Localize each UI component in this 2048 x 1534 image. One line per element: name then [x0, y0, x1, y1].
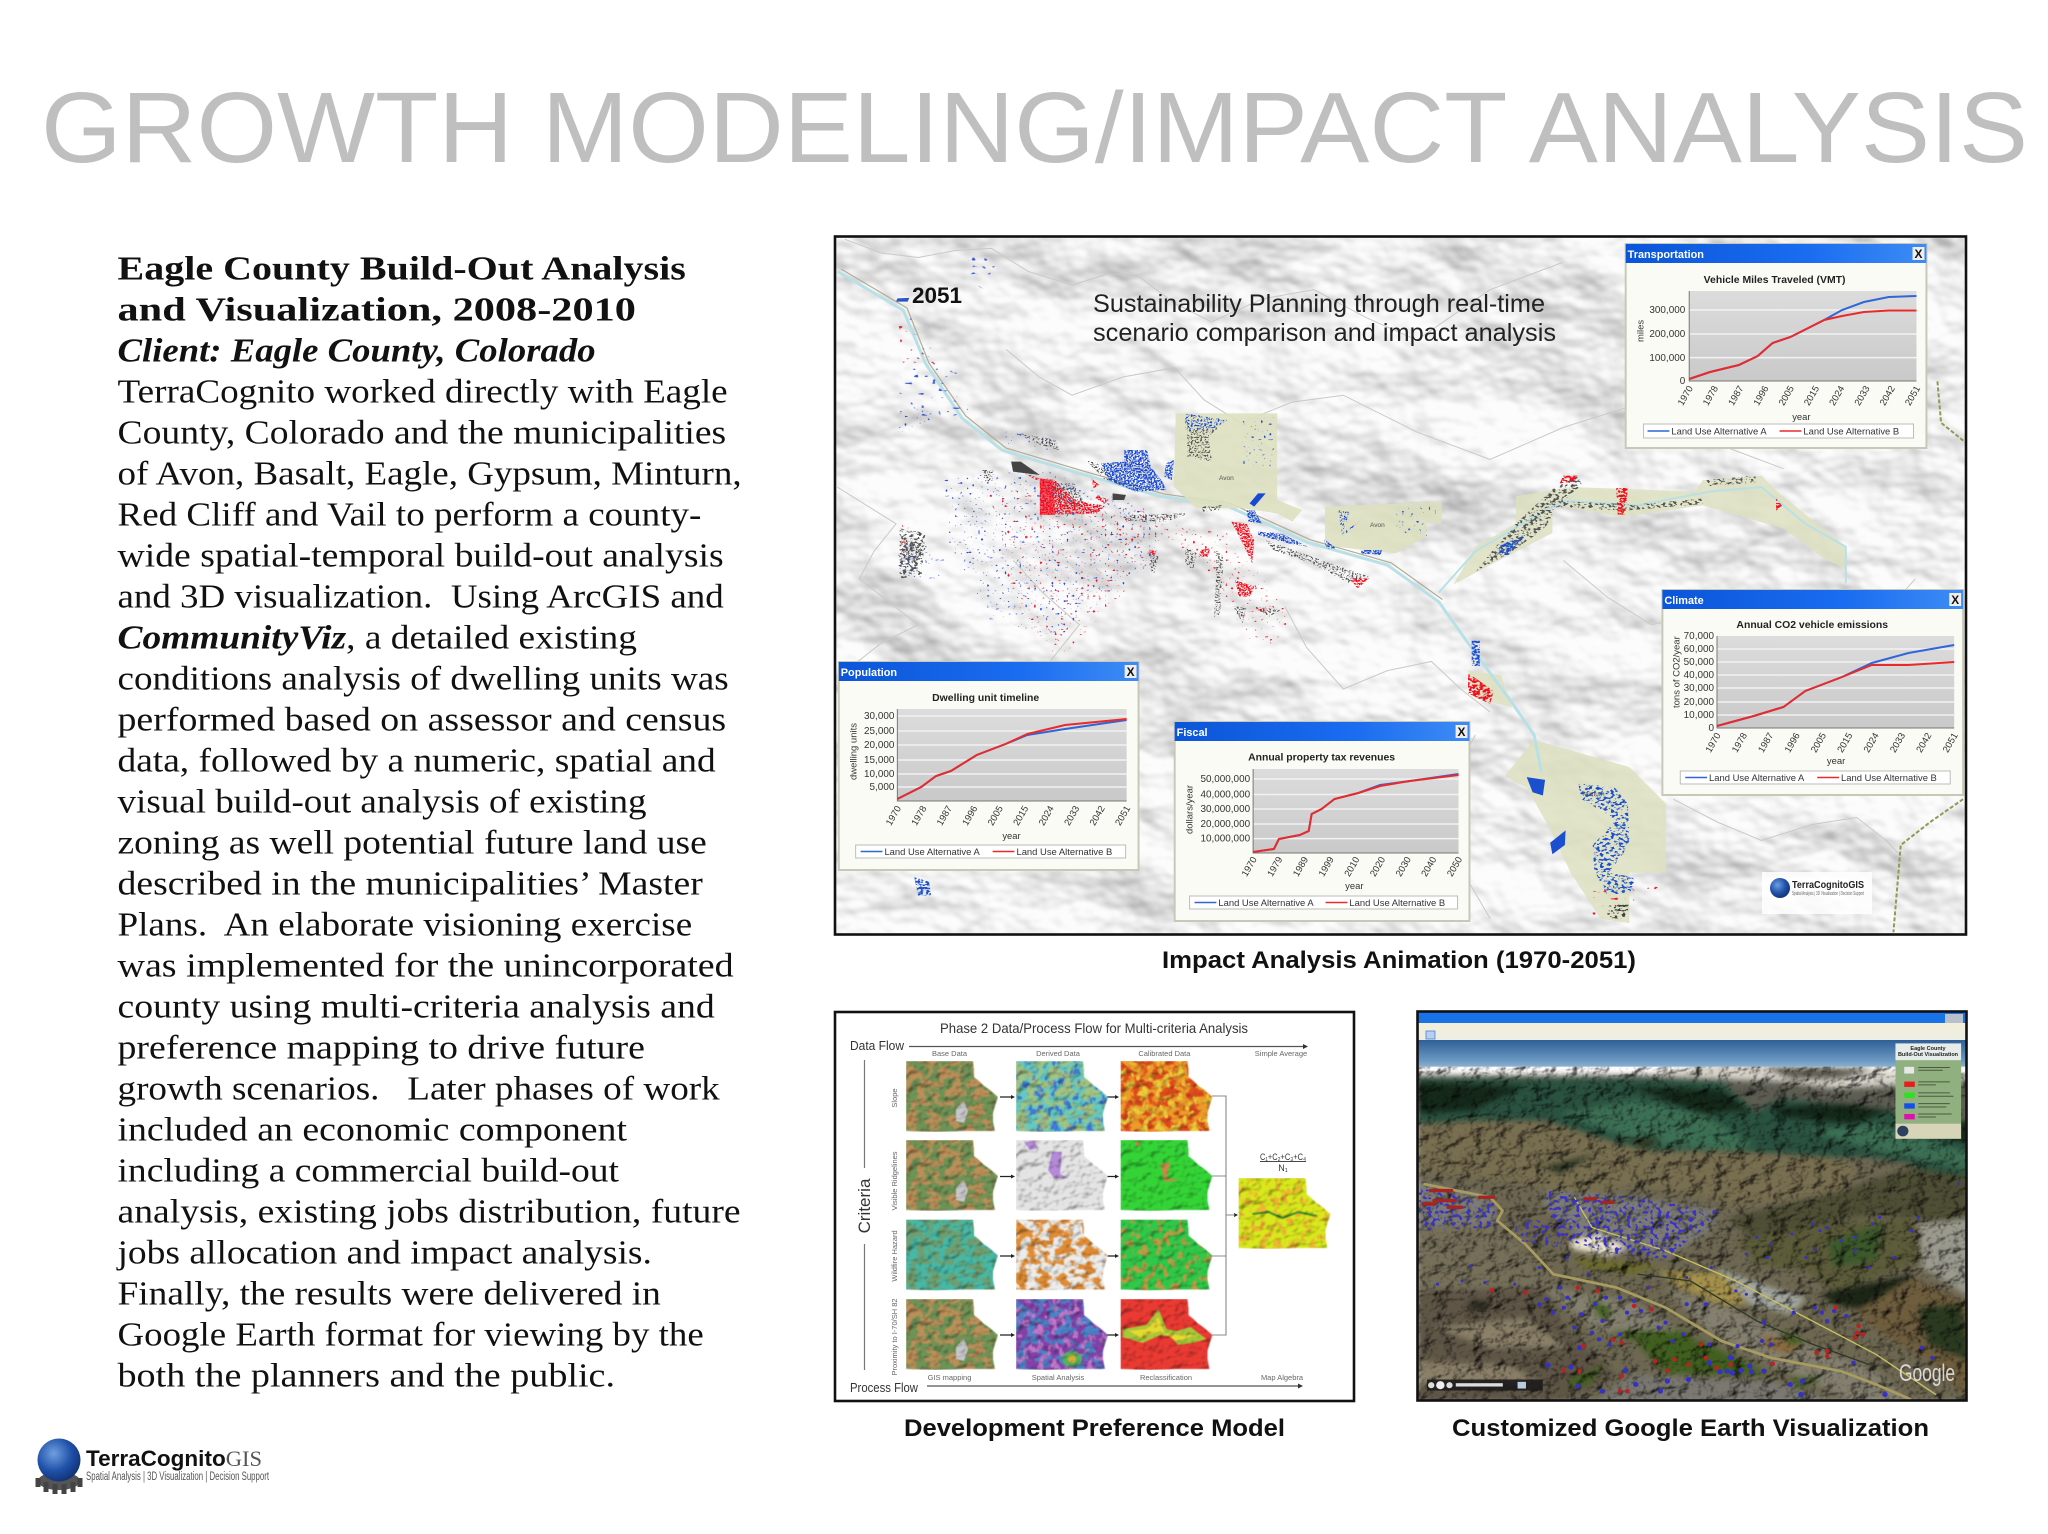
chart window: fiscal: Fiscal — [1177, 727, 1208, 739]
chart window: transportation: 200,000 — [1649, 329, 1686, 340]
chart window: fiscal: year — [1345, 881, 1364, 892]
chart window: transportation: Land Use Alternative B — [1803, 426, 1899, 438]
town labels on map: Avon — [1370, 522, 1385, 529]
body paragraph: conditions analysis of dwelling units was — [118, 660, 729, 698]
chart window: population: Land Use Alternative A — [884, 847, 980, 858]
data flow axis: Data Flow — [850, 1038, 905, 1053]
process flow axis: Map Algebra — [1261, 1373, 1304, 1382]
chart window: climate: 70,000 — [1684, 631, 1714, 642]
chart window: population: 2033 — [1062, 804, 1082, 828]
chart window: climate: 2051 — [1941, 731, 1961, 755]
chart window: fiscal: 50,000,000 — [1200, 774, 1251, 785]
body paragraph: data, followed by a numeric, spatial and — [118, 742, 716, 780]
body paragraph: Google Earth format for viewing by the — [118, 1316, 704, 1354]
body paragraph: both the planners and the public. — [118, 1357, 615, 1395]
map logo — [1762, 872, 1872, 914]
chart window: transportation: Transportation — [1628, 249, 1704, 261]
chart window: fiscal: 1979 — [1265, 855, 1285, 879]
body paragraph: growth scenarios. Later phases of work — [118, 1070, 720, 1108]
chart window: transportation: 1987 — [1726, 384, 1746, 408]
chart window: transportation: 1978 — [1701, 384, 1721, 408]
data flow axis — [850, 1038, 1308, 1058]
chart window: climate: 1970 — [1704, 731, 1724, 755]
map year label: 2051 — [912, 283, 962, 308]
chart window: climate: 2033 — [1888, 731, 1908, 755]
process flow axis: Reclassification — [1140, 1373, 1192, 1382]
body paragraph: performed based on assessor and census — [118, 701, 726, 739]
chart window: fiscal: 2030 — [1394, 855, 1414, 879]
chart window: fiscal: dollars/year — [1185, 785, 1196, 834]
criteria axis — [855, 1060, 899, 1376]
chart window: fiscal: 30,000,000 — [1200, 804, 1251, 815]
project heading: Eagle County Build-Out Analysis — [118, 250, 686, 288]
body paragraph: county using multi-criteria analysis and — [118, 988, 715, 1026]
body paragraph: Finally, the results were delivered in — [118, 1275, 661, 1313]
body paragraph: Red Cliff and Vail to perform a county- — [118, 496, 701, 534]
body paragraph: TerraCognito worked directly with Eagle — [118, 373, 728, 411]
chart window: fiscal: X — [1458, 725, 1466, 739]
chart window: transportation: Land Use Alternative A — [1671, 426, 1767, 438]
project heading: and Visualization, 2008-2010 — [118, 291, 636, 329]
chart window: population: Population — [841, 667, 897, 679]
map headline — [1093, 290, 1556, 347]
chart window: population: 1978 — [909, 804, 929, 828]
criteria axis: Wildfire Hazard — [890, 1230, 899, 1282]
criteria axis: Visible Ridgelines — [890, 1151, 899, 1211]
data flow axis: Simple Average — [1255, 1049, 1307, 1058]
project heading — [118, 250, 686, 329]
chart window: transportation: 0 — [1680, 376, 1686, 387]
chart window: transportation: year — [1792, 412, 1811, 423]
chart window: climate: 30,000 — [1684, 683, 1714, 694]
chart window: population: 15,000 — [864, 755, 895, 766]
logo: TerraCognito GIS — [38, 1438, 270, 1494]
connector arrows — [1000, 1095, 1238, 1337]
body paragraph: CommunityViz , a detailed existing — [118, 619, 637, 657]
result map and formula — [1238, 1152, 1330, 1249]
chart window: transportation: 2042 — [1878, 384, 1898, 408]
chart window: fiscal: 20,000,000 — [1200, 819, 1251, 830]
chart window: population: 1987 — [935, 804, 955, 828]
chart window: transportation: 1970 — [1676, 384, 1696, 408]
chart window: climate: 2024 — [1862, 731, 1882, 755]
town labels on map — [1219, 475, 1605, 798]
chart window: population: 1970 — [884, 804, 904, 828]
chart window: transportation: 2051 — [1903, 384, 1923, 408]
central valley development — [898, 407, 1442, 660]
chart window: climate: Land Use Alternative A — [1709, 773, 1805, 784]
title: GROWTH MODELING/IMPACT ANALYSIS — [41, 72, 2028, 184]
chart window: population: 2042 — [1088, 804, 1108, 828]
chart window: transportation: 300,000 — [1649, 305, 1686, 316]
data flow axis: Base Data — [932, 1049, 968, 1058]
legend title — [1898, 1046, 1958, 1056]
chart window: transportation: 2024 — [1827, 384, 1847, 408]
client line: Client: Eagle County, Colorado — [118, 332, 596, 370]
process flow axis: GIS mapping — [928, 1373, 971, 1382]
window chrome — [1418, 1012, 1966, 1040]
chart window: fiscal: 2010 — [1342, 855, 1362, 879]
panel: development preference model — [835, 1012, 1354, 1401]
google watermark: Google — [1899, 1360, 1955, 1387]
sky — [1418, 1040, 1966, 1068]
chart window: population: 2051 — [1113, 804, 1133, 828]
body paragraph: of Avon, Basalt, Eagle, Gypsum, Minturn, — [118, 455, 742, 493]
legend overlay — [1895, 1043, 1961, 1139]
body paragraph: included an economic component — [118, 1111, 628, 1149]
map headline: scenario comparison and impact analysis — [1093, 319, 1556, 347]
tagline: Spatial Analysis | 3D Visualization | Decision Support — [86, 1471, 270, 1483]
body paragraph: described in the municipalities’ Master — [118, 865, 703, 903]
chart window: population: dwelling units — [849, 723, 860, 780]
chart window: transportation: 2015 — [1802, 384, 1822, 408]
map: hillshade terrain — [835, 237, 1965, 934]
body paragraph — [116, 373, 742, 1395]
roads and development points — [1416, 1043, 1961, 1400]
body paragraph: preference mapping to drive future — [118, 1029, 645, 1067]
caption: impact analysis: Impact Analysis Animation (1970-2051) — [1162, 947, 1636, 974]
map logo: Spatial Analysis | 3D Visualization | Decision Support — [1792, 891, 1864, 897]
diagram title: Phase 2 Data/Process Flow for Multi-criteria Analysis — [940, 1020, 1248, 1036]
chart window: climate: Climate — [1664, 595, 1704, 607]
chart window: climate: X — [1951, 593, 1959, 607]
body paragraph: visual build-out analysis of existing — [118, 783, 647, 821]
chart window: population — [839, 662, 1139, 870]
chart window: climate: 0 — [1708, 723, 1714, 734]
town labels on map: Minturn — [1583, 791, 1605, 798]
chart window: population: year — [1002, 831, 1021, 842]
map row: ridgelines — [906, 1140, 1212, 1211]
caption: development preference model: Development Preference Model — [904, 1415, 1285, 1442]
chart window: climate: Annual CO2 vehicle emissions — [1736, 620, 1888, 631]
chart window: climate: Land Use Alternative B — [1841, 773, 1937, 784]
chart window: climate: 2005 — [1809, 731, 1829, 755]
chart window: population: 30,000 — [864, 711, 895, 722]
criteria axis: Proximity to I-70/SH 82 — [890, 1298, 899, 1376]
chart window: fiscal: 2050 — [1445, 855, 1465, 879]
map row: proximity — [906, 1299, 1212, 1370]
map: base layer, contours, river and land use overlays — [837, 239, 1967, 932]
icon: globe — [38, 1438, 80, 1482]
chart window: climate: 40,000 — [1684, 670, 1714, 681]
chart window: climate: 20,000 — [1684, 697, 1714, 708]
criteria map grid — [906, 1061, 1212, 1370]
chart window: transportation: 100,000 — [1649, 353, 1686, 364]
chart window: climate: 2015 — [1835, 731, 1855, 755]
chart window: fiscal: Land Use Alternative B — [1349, 898, 1445, 909]
text block: project description — [116, 250, 742, 1395]
criteria axis: Slope — [890, 1088, 899, 1108]
legend title: Eagle County — [1910, 1046, 1947, 1052]
process flow axis: Process Flow — [850, 1380, 919, 1395]
map row: slope — [906, 1061, 1212, 1132]
criteria axis: Criteria — [855, 1178, 874, 1233]
chart window: fiscal: Land Use Alternative A — [1218, 898, 1314, 909]
chart window: climate: 60,000 — [1684, 644, 1714, 655]
aerial terrain — [1416, 1067, 1971, 1403]
map row: wildfire — [906, 1220, 1212, 1290]
chart window: transportation: Vehicle Miles Traveled (VMT) — [1704, 275, 1845, 286]
body paragraph: and 3D visualization. Using ArcGIS and — [118, 578, 724, 616]
chart window: fiscal — [1175, 722, 1469, 921]
chart window: fiscal: 1999 — [1317, 855, 1337, 879]
body paragraph: Plans. An elaborate visioning exercise — [118, 906, 692, 944]
chart window: fiscal: 2020 — [1368, 855, 1388, 879]
chart window: population: 25,000 — [864, 726, 895, 737]
map logo: TerraCognitoGIS — [1792, 880, 1864, 891]
chart window: population: Land Use Alternative B — [1016, 847, 1112, 858]
chart window: transportation: 2033 — [1853, 384, 1873, 408]
chart window: population: 1996 — [960, 804, 980, 828]
legend title: Build-Out Visualization — [1898, 1052, 1959, 1058]
body paragraph: was implemented for the unincorporated — [118, 947, 734, 985]
chart window: transportation: X — [1915, 247, 1922, 261]
chart window: transportation: miles — [1636, 320, 1647, 342]
chart window: transportation — [1626, 244, 1926, 448]
chart window: fiscal: 2040 — [1419, 855, 1439, 879]
chart window: climate: tons of CO2/year — [1671, 636, 1682, 708]
chart window: fiscal: 10,000,000 — [1200, 834, 1251, 845]
chart window: climate: 10,000 — [1684, 710, 1714, 721]
body paragraph: zoning as well potential future land use — [118, 824, 707, 862]
panel: google earth visualization — [1416, 1012, 1971, 1403]
caption: google earth: Customized Google Earth Visualization — [1452, 1415, 1929, 1442]
chart window: climate: 1987 — [1756, 731, 1776, 755]
chart window: climate: 1996 — [1783, 731, 1803, 755]
chart window: climate: 1978 — [1730, 731, 1750, 755]
wordmark: TerraCognitoGIS — [86, 1446, 262, 1471]
process flow axis: Spatial Analysis — [1032, 1373, 1085, 1382]
chart window: climate: year — [1827, 756, 1845, 767]
chart window: fiscal: Annual property tax revenues — [1248, 752, 1395, 764]
chart window: climate: 50,000 — [1684, 657, 1714, 668]
chart window: transportation: 2005 — [1777, 384, 1797, 408]
panel: impact analysis map — [835, 236, 1967, 934]
body paragraph: jobs allocation and impact analysis. — [116, 1234, 652, 1272]
chart window: population: 2015 — [1011, 804, 1031, 828]
icon: gear — [38, 1472, 80, 1494]
body paragraph: County, Colorado and the municipalities — [118, 414, 726, 452]
process flow axis — [850, 1373, 1304, 1395]
chart window: fiscal: 1970 — [1240, 855, 1260, 879]
chart window: population: Dwelling unit timeline — [932, 693, 1039, 704]
body paragraph: analysis, existing jobs distribution, future — [118, 1193, 741, 1231]
map headline: Sustainability Planning through real-time — [1093, 290, 1545, 318]
result map and formula: N₁ — [1278, 1163, 1288, 1173]
chart window: fiscal: 40,000,000 — [1200, 789, 1251, 801]
body paragraph: including a commercial build-out — [118, 1152, 620, 1190]
chart window: population: 5,000 — [870, 782, 895, 793]
chart window: population: 20,000 — [864, 740, 895, 751]
chart window: climate: 2042 — [1914, 731, 1934, 755]
chart window: population: 2005 — [986, 804, 1006, 828]
data flow axis: Calibrated Data — [1138, 1049, 1191, 1058]
chart window: fiscal: 1989 — [1291, 855, 1311, 879]
town labels on map: Avon — [1219, 475, 1234, 482]
east valley and south development — [896, 258, 1782, 919]
chart window: population: X — [1127, 665, 1135, 679]
chart window: climate — [1662, 590, 1963, 795]
chart window: transportation: 1996 — [1752, 384, 1772, 408]
body paragraph: wide spatial-temporal build-out analysis — [118, 537, 724, 575]
data flow axis: Derived Data — [1036, 1049, 1081, 1058]
result map and formula: C₁+C₂+C₃+C₄ — [1260, 1152, 1306, 1162]
chart window: population: 2024 — [1037, 804, 1057, 828]
timeline control — [1427, 1380, 1543, 1391]
chart window: population: 10,000 — [864, 769, 895, 780]
